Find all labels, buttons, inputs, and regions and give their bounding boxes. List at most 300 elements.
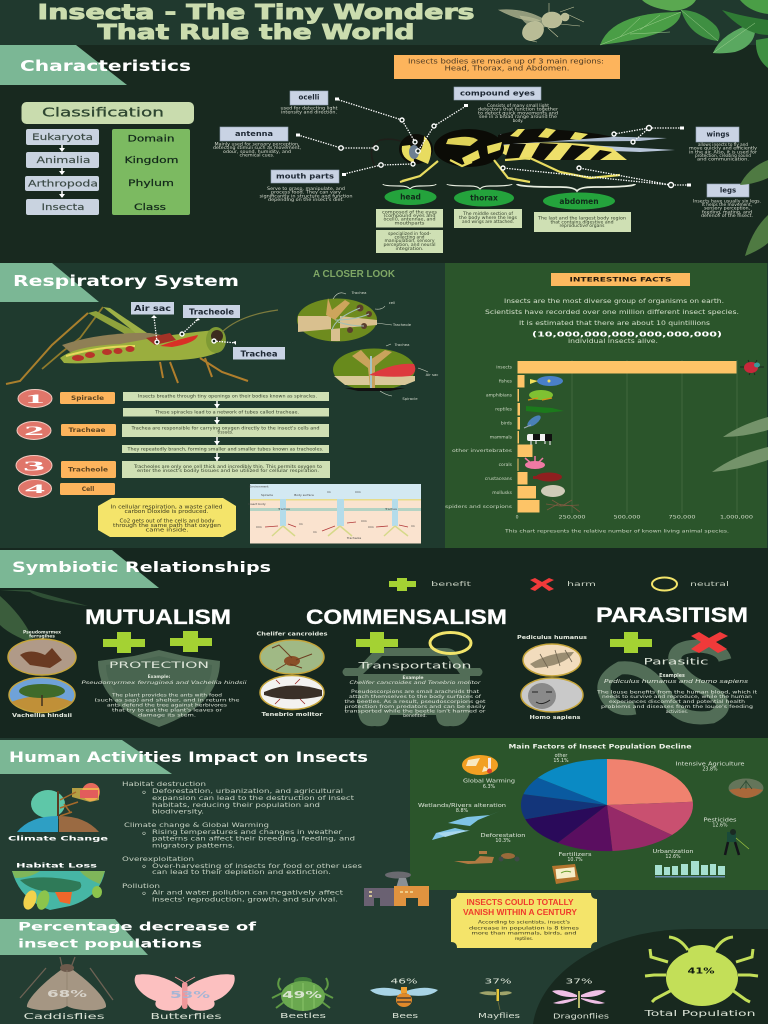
body regions: thorax xyxy=(470,194,498,202)
icon: dragonflies xyxy=(552,978,609,1020)
panel: parasitism: Examples xyxy=(659,673,685,679)
wasp label: compound eyes xyxy=(416,87,559,153)
icon: bees: 46% xyxy=(390,978,418,986)
text block: human impacts: biodiversity. xyxy=(152,810,204,816)
panel: mutualism: MUTUALISM xyxy=(85,606,231,629)
illustration: closer look diagram two: Trachea xyxy=(394,342,409,347)
diagram: tracheal system: Trachea xyxy=(384,507,397,511)
diagram: tracheal system: O₂ xyxy=(299,522,304,526)
panel: commensalism: Transportation xyxy=(357,662,472,672)
heading: interesting facts xyxy=(551,273,690,286)
panel: parasitism: needs to survive and reproduce, while the human xyxy=(602,694,752,700)
pie chart: main factors of insect population decline: 12.6% xyxy=(665,854,681,860)
icon: agriculture xyxy=(728,778,764,798)
wasp label: legs: It helps the movement, xyxy=(702,202,752,207)
icon: butterflies xyxy=(135,974,235,1021)
pie chart: main factors of insect population decline: Main Factors of Insect Population Decline xyxy=(508,742,692,750)
diagram: tracheal system xyxy=(248,484,421,544)
icon: dragonflies: 37% xyxy=(566,978,593,986)
photo: Pediculus humanus xyxy=(517,635,587,676)
wasp label: mouth parts xyxy=(260,162,415,202)
photo: Pseudomyrmex ferrugines: ferrugines xyxy=(29,634,55,640)
text block: insect facts: It is estimated that there are about 10 quintillions xyxy=(519,321,710,327)
icon: total population bug xyxy=(643,937,758,1018)
icon: bees: Bees xyxy=(392,1012,419,1020)
icon: butterflies: 53% xyxy=(170,990,210,1001)
diagram: tracheal system: Trachea xyxy=(277,507,290,511)
icon: caddisflies moth: 68% xyxy=(47,989,87,1000)
step 4: cell xyxy=(18,480,115,498)
photo: Tenebrio molitor xyxy=(260,676,324,718)
photo: Homo sapiens xyxy=(521,678,583,721)
wasp label: mouth parts: Serve to grasp, manipulate, and xyxy=(267,186,346,191)
icon: mayflies: Mayflies xyxy=(478,1012,521,1020)
text block: human impacts: insects' reproduction, growth, and survival. xyxy=(152,898,338,904)
text block: human impacts: Overexploitation xyxy=(122,857,194,863)
panel: classification: Kingdom xyxy=(124,156,178,166)
icon: bees xyxy=(370,978,438,1020)
bar chart: known living animal species: corals xyxy=(499,462,513,468)
banner: percentage decrease of insect populations: insect populations xyxy=(18,936,202,950)
step 1: spiracle xyxy=(18,390,329,408)
title: That Rule the World xyxy=(98,20,414,44)
diagram: tracheal system: O₂ xyxy=(327,490,332,494)
photo: Chelifer cancroides xyxy=(256,632,328,674)
step 2: tracheae: Tracheae xyxy=(68,427,106,434)
step 2: tracheae: 2 xyxy=(24,423,44,438)
body regions: specialized in food- xyxy=(388,231,432,236)
backdrop: total population xyxy=(533,929,768,1024)
panel: commensalism xyxy=(256,606,507,726)
wasp label: wings: protection, creating sound xyxy=(695,153,751,158)
bar chart: known living animal species: mollusks xyxy=(492,490,513,496)
labels: grasshopper parts: Trachea xyxy=(240,350,278,358)
diagram: tracheal system: Environment xyxy=(249,484,269,488)
flow text: tracheae network xyxy=(123,401,329,416)
banner: Respiratory System xyxy=(0,263,239,302)
leaf: symbiotic panel xyxy=(0,590,88,644)
bar chart: known living animal species: 750,000 xyxy=(668,514,696,520)
callout: insects could vanish xyxy=(451,893,597,948)
body regions: perception, and neural xyxy=(384,242,436,247)
photo: Chelifer cancroides: Chelifer cancroides xyxy=(256,632,328,638)
panel: classification: Classification xyxy=(42,106,164,120)
icon: lobster xyxy=(533,472,562,482)
panel: mutualism: that try to eat the plant's leaves or xyxy=(112,708,222,714)
illustration: closer look diagram two xyxy=(333,342,438,401)
pie chart: main factors of insect population decline: Intensive Agriculture xyxy=(676,762,745,768)
wasp label: compound eyes: Consists of many small light xyxy=(487,103,549,108)
wasp label: wings: move quickly and efficiently xyxy=(689,146,758,150)
bar chart: known living animal species: 250,000 xyxy=(558,514,586,520)
body regions: The last and the largest body region xyxy=(537,216,627,220)
pie chart: main factors of insect population decline: Fertilizers xyxy=(558,852,592,858)
body regions: collecting and xyxy=(394,234,425,240)
text block: human impacts: habitats, reducing their population and xyxy=(152,803,320,809)
wasp label: antenna xyxy=(213,127,378,158)
callout: three body regions: Insects bodies are made up of 3 main regions: xyxy=(408,58,604,66)
wasp label: antenna: Mainly used for sensory perception, xyxy=(214,142,300,146)
icon: beetles xyxy=(272,977,333,1020)
icon: bee sketch xyxy=(499,3,584,44)
panel: commensalism: attach themselves to the body surfaces of xyxy=(349,694,481,700)
illustration: grasshopper xyxy=(6,307,278,384)
icon: cow xyxy=(527,434,552,445)
step 4: cell: Cell xyxy=(82,486,94,493)
heading: a closer look: A CLOSER LOOK xyxy=(313,269,396,280)
icon: caddisflies moth xyxy=(20,957,113,1021)
wasp label: compound eyes: detectors that function together xyxy=(478,106,558,112)
icon: bird xyxy=(524,413,542,429)
callout: three body regions: Head, Thorax, and Abdomen. xyxy=(444,64,570,72)
leaves: chart panel xyxy=(712,417,768,472)
bar chart: known living animal species: 0 xyxy=(516,514,519,520)
wasp label: compound eyes: compound eyes xyxy=(460,90,535,98)
bar chart: known living animal species: fishes xyxy=(499,378,513,384)
pie chart: main factors of insect population decline: 6.3% xyxy=(483,784,496,790)
photo: Tenebrio molitor: Tenebrio molitor xyxy=(262,712,323,718)
banner: percentage decrease of insect populations: Percentage decrease of xyxy=(18,920,258,934)
panel: classification: Insecta xyxy=(42,203,84,213)
wasp label: compound eyes: see in a broad range around the xyxy=(479,114,558,119)
wasp label: ocelli: intensity and direction. xyxy=(281,110,337,114)
bar chart: known living animal species: birds xyxy=(501,420,513,426)
panel: classification: Phylum xyxy=(128,179,174,189)
body regions: that contains digestive and xyxy=(550,220,614,224)
panel: parasitism: Parasitic xyxy=(644,658,709,668)
pie chart: main factors of insect population decline: Deforestation xyxy=(480,833,526,839)
legend: benefit harm neutral: harm xyxy=(567,580,596,588)
diagram: tracheal system: CO₂ xyxy=(361,519,368,523)
title xyxy=(38,0,474,44)
pie chart: main factors of insect population decline: Urbanization xyxy=(652,849,694,855)
body regions: integration. xyxy=(396,246,424,251)
bar chart: known living animal species: amphibians xyxy=(486,392,513,398)
wasp label: legs: feeding, mating, and xyxy=(702,210,753,214)
step 4: cell: 4 xyxy=(25,481,47,496)
panel: parasitism: The louse benefits from the human blood, which it xyxy=(596,690,757,696)
wasp label: wings: wings xyxy=(706,130,730,138)
illustration: closer look diagram one xyxy=(297,290,412,342)
text block: human impacts: migratory patterns. xyxy=(152,844,235,850)
callout: insects could vanish: INSECTS COULD TOTALLY xyxy=(466,897,574,907)
wasp label: wings xyxy=(612,126,758,162)
wasp label: wings: and communication. xyxy=(697,156,749,162)
icon: habitat loss xyxy=(12,862,105,911)
step 2: tracheae xyxy=(17,417,329,440)
body regions: composed of the eyes xyxy=(382,210,437,214)
panel: mutualism: The plant provides the ants with food xyxy=(111,692,222,698)
legend: benefit harm neutral: neutral xyxy=(690,580,729,588)
panel: parasitism: Pediculus humanus and Homo sapiens xyxy=(604,679,749,685)
step 2: tracheae: tissues. xyxy=(218,430,233,434)
wasp label: ocelli: ocelli xyxy=(299,94,319,102)
panel: mutualism: ants defend the tree against herbivores xyxy=(107,702,228,708)
step 3: tracheole: enter the insect's bodily tissues and be utilized for cellular respiration. xyxy=(137,468,319,473)
wasp label: mouth parts: depending on the insect's diet. xyxy=(268,197,344,202)
diagram: tracheal system: Tracheole xyxy=(346,536,361,540)
panel: mutualism xyxy=(8,606,248,727)
wasp label: legs: legs xyxy=(720,186,736,194)
banner: Symbiotic Relationships: Symbiotic Relationships xyxy=(12,560,271,576)
legend: benefit harm neutral: benefit xyxy=(431,580,472,588)
diagram: tracheal system: O₂ xyxy=(411,524,416,528)
panel: parasitism: PARASITISM xyxy=(596,604,748,627)
bar chart: known living animal species: spiders and scorpions xyxy=(445,504,513,510)
body regions: ocelli), antennae, and xyxy=(384,216,436,222)
pie chart: main factors of insect population decline: Global Warming xyxy=(463,778,515,784)
diagram: tracheal system: Spiracle xyxy=(261,493,273,497)
icon: dragonflies: Dragonflies xyxy=(553,1012,609,1020)
callout: insects could vanish: VANISH WITHIN A CENTURY xyxy=(463,907,577,917)
step 2: tracheae: Trachea are responsible for carrying oxygen directly to the insect's cells and xyxy=(130,426,320,430)
icon: climate change: Climate Change xyxy=(8,834,109,842)
pie chart: main factors of insect population decline: 15.1% xyxy=(553,758,569,764)
step 1: spiracle: Insects breathe through tiny openings on their bodies known as spiracles. xyxy=(138,394,317,398)
icon: butterflies: Butterflies xyxy=(150,1012,222,1021)
photo: Vachellia hindsii xyxy=(9,678,75,719)
panel: mutualism: PROTECTION xyxy=(109,661,209,671)
diagram: tracheal system: O₂ xyxy=(313,530,318,534)
wasp label: mouth parts: significantly in structure and function xyxy=(260,194,353,198)
panel: parasitism: activities. xyxy=(666,709,688,715)
body regions: head xyxy=(400,192,421,202)
callout: cellular respiration: In cellular respiration, a waste called xyxy=(110,504,222,510)
diagram: tracheal system: CO₂ xyxy=(355,490,362,494)
icon: factory xyxy=(364,872,429,906)
panel: commensalism: transported while the beetle isn't harmed or xyxy=(344,708,486,714)
body regions: The middle section of xyxy=(462,211,514,216)
bar chart: known living animal species: mammals xyxy=(490,434,513,440)
wasp label: legs xyxy=(501,166,761,218)
text block: human impacts: can lead to their depletion and extinction. xyxy=(152,870,331,876)
wasp label: ocelli xyxy=(280,91,417,144)
panel: classification: Domain xyxy=(128,134,174,144)
body regions: and wings are attached. xyxy=(462,219,514,224)
icon: spider xyxy=(546,500,580,512)
text block: insect facts xyxy=(485,299,739,345)
icon: beetles: 49% xyxy=(282,990,322,1001)
panel: commensalism: COMMENSALISM xyxy=(306,606,507,629)
banner: Respiratory System: Respiratory System xyxy=(13,272,239,290)
callout: cellular respiration xyxy=(98,498,236,537)
photo: Vachellia hindsii: Vachellia hindsii xyxy=(12,713,72,719)
text block: insect facts: (10,000,000,000,000,000,000) xyxy=(532,330,722,338)
text block: human impacts: expansion can lead to the destruction of insect xyxy=(152,796,355,802)
step 3: tracheole: 3 xyxy=(23,460,45,474)
body regions: manipulation, sensory xyxy=(384,238,435,243)
icon: lizard xyxy=(526,406,564,413)
photo: Pediculus humanus: Pediculus humanus xyxy=(517,635,587,641)
labels: grasshopper parts: Air sac xyxy=(134,304,171,313)
body regions: (compound eyes and xyxy=(384,213,436,218)
leaves: top right xyxy=(600,0,768,68)
wasp label: antenna: antenna xyxy=(235,130,273,138)
icon: beetles: Beetles xyxy=(280,1011,326,1020)
callout: insects could vanish: According to scientists, insect's xyxy=(478,920,571,926)
step 3: tracheole xyxy=(16,453,330,478)
flow text: tracheae network: These spiracles lead to a network of tubes called tracheae. xyxy=(154,410,299,414)
pie chart: main factors of insect population decline: Wetlands/Rivers alteration xyxy=(418,803,506,809)
illustration: closer look diagram two: Spiracle xyxy=(402,396,418,401)
pie chart: main factors of insect population decline xyxy=(418,742,764,884)
bar chart: known living animal species: 500,000 xyxy=(614,514,641,520)
text block: human impacts: Climate change & Global Warming xyxy=(124,823,269,829)
banner: Symbiotic Relationships xyxy=(0,550,271,588)
wasp label: antenna: detecting stimuli such as movement, xyxy=(213,145,301,150)
text block: human impacts: Air and water pollution can negatively affect xyxy=(152,890,344,896)
flow text: branching: They repeatedly branch, forming smaller and smaller tubes known as tracheoles. xyxy=(126,446,324,452)
icon: global warming xyxy=(462,755,498,775)
panel: commensalism: Example xyxy=(402,675,424,681)
icon: caddisflies moth: Caddisflies xyxy=(24,1012,104,1021)
wasp label: legs: defence of the insect. xyxy=(701,213,753,218)
panel: classification: Arthropoda xyxy=(28,180,98,190)
wasp label: legs: Insects have usually six legs. xyxy=(693,198,761,204)
banner: percentage decrease of insect populations xyxy=(0,919,258,955)
illustration: closer look diagram one: cell xyxy=(389,300,395,305)
heading: interesting facts: INTERESTING FACTS xyxy=(570,278,672,284)
icon: habitat loss: Habitat Loss xyxy=(16,862,97,870)
panel: mutualism: Pseudomyrmex ferrugineá and Vachellia hindsii xyxy=(82,679,248,686)
pie chart: main factors of insect population decline: other xyxy=(555,753,567,759)
legend: benefit harm neutral xyxy=(389,578,729,591)
step 1: spiracle: 1 xyxy=(25,391,45,406)
wasp label: antenna: chemical cues. xyxy=(240,152,274,158)
callout: insects could vanish: reptiles. xyxy=(515,936,533,942)
body regions xyxy=(376,184,635,253)
bar chart: known living animal species xyxy=(445,360,764,534)
panel: parasitism: problems and diseases from the louse's feeding xyxy=(601,704,753,710)
step 1: spiracle: Spiracle xyxy=(71,395,104,402)
illustration: closer look diagram one: Trachea xyxy=(351,290,366,295)
panel: mutualism: (such as sap) and shelter, and in return the xyxy=(94,698,240,704)
icon: ladybug xyxy=(740,360,764,375)
text block: human impacts: Pollution xyxy=(122,884,160,890)
callout: insects could vanish: decrease in population is 8 times xyxy=(469,926,580,932)
panel: commensalism: Chelifer cancroides and Tenebrio molitor xyxy=(350,680,482,686)
illustration: wasp xyxy=(371,128,675,182)
panel: parasitism: experiences discomfort and potential health xyxy=(609,699,745,705)
wasp label: compound eyes: to detect quick movements and xyxy=(478,110,559,116)
icon: fertilizer bag xyxy=(552,864,579,884)
icon: deforestation logs xyxy=(454,851,520,864)
illustration: closer look diagram one: Tracheole xyxy=(392,322,412,327)
photo: Pseudomyrmex ferrugines: Pseudomyrmex xyxy=(23,630,61,636)
pie chart: main factors of insect population decline: 8.8% xyxy=(456,808,469,814)
panel: classification xyxy=(22,102,194,215)
body regions: abdomen xyxy=(559,197,599,206)
panel: commensalism: the beetles. As a result, pseudoscorpions get xyxy=(344,699,486,705)
banner: Characteristics xyxy=(0,45,191,85)
diagram: tracheal system: Body surface xyxy=(294,493,314,497)
pie chart: main factors of insect population decline: 10.7% xyxy=(567,857,583,863)
bar chart: known living animal species: This chart represents the relative number of known living animal species. xyxy=(504,528,729,534)
photo: Homo sapiens: Homo sapiens xyxy=(530,715,581,721)
icon: pesticide worker xyxy=(725,829,749,855)
icon: wetlands xyxy=(432,811,500,840)
panel: commensalism: protection from predators and can be easily xyxy=(344,704,486,710)
wasp label: legs: sensory perception, xyxy=(704,206,750,210)
diagram: tracheal system: CO₂ xyxy=(256,525,263,529)
icon: shell xyxy=(541,485,565,497)
labels: grasshopper parts: Tracheole xyxy=(189,308,235,316)
text block: human impacts xyxy=(122,782,362,904)
callout: cellular respiration: Co2 gets out of the cells and body xyxy=(120,518,215,524)
text block: human impacts: Habitat destruction xyxy=(122,782,206,788)
body regions: the body where the legs xyxy=(459,215,517,220)
panel: classification: Animalia xyxy=(36,156,90,166)
flow text: branching xyxy=(122,437,329,453)
body regions: mouthparts xyxy=(394,220,424,226)
panel: commensalism: Pseudoscorpions are small arachnids that xyxy=(351,689,479,695)
leaves: right edge xyxy=(740,160,768,256)
diagram: tracheal system: Insect body xyxy=(248,502,266,506)
pie chart: main factors of insect population decline: 10.3% xyxy=(495,838,511,844)
panel: mutualism: damage its stem. xyxy=(138,712,196,718)
callout: insects could vanish: more than mammals, birds, and xyxy=(472,930,577,936)
body regions: reproductive organs xyxy=(560,223,604,228)
icon: climate change xyxy=(8,783,109,842)
text block: human impacts: Deforestation, urbanization, and agricultural xyxy=(152,789,344,795)
icon: fish xyxy=(530,376,563,386)
pie chart: main factors of insect population decline: 12.6% xyxy=(712,822,728,828)
text block: insect facts: Scientists have recorded over one million different insect species. xyxy=(485,310,739,316)
text block: human impacts: Over-harvesting of insects for food or other uses xyxy=(152,864,362,870)
callout: three body regions xyxy=(394,55,620,79)
bar chart: known living animal species: crustaceans xyxy=(485,476,513,482)
text block: human impacts: patterns can affect their breeding, feeding, and xyxy=(152,836,355,842)
bar chart: known living animal species: insects xyxy=(496,364,513,370)
step 3: tracheole: Tracheole xyxy=(68,466,108,474)
wasp label: compound eyes: body. xyxy=(513,118,523,123)
icon: coral xyxy=(525,456,545,469)
panel: mutualism: Example: xyxy=(148,674,171,680)
text block: human impacts: Rising temperatures and changes in weather xyxy=(152,830,343,836)
photo: Pseudomyrmex ferrugines xyxy=(8,630,76,675)
callout: cellular respiration: carbon Dioxide is produced. xyxy=(124,509,209,515)
title: Insecta - The Tiny Wonders xyxy=(38,0,474,24)
panel: commensalism: benefited. xyxy=(403,713,427,719)
panel: classification: Class xyxy=(134,203,167,213)
icon: frog xyxy=(528,390,553,400)
wasp label: mouth parts: mouth parts xyxy=(276,172,334,180)
icon: mayflies: 37% xyxy=(484,978,512,986)
illustration: closer look diagram two: Air sac xyxy=(426,372,438,377)
wasp label: ocelli: used for detecting light xyxy=(280,106,338,110)
step 3: tracheole: Tracheoles are only one cell thick and incredibly thin. This permits oxygen to xyxy=(133,464,323,469)
wasp label: wings: allows insects to fly and xyxy=(698,142,748,147)
icon: city xyxy=(655,861,725,878)
wasp label: antenna: odour, sound, humidity, and xyxy=(223,149,292,154)
panel: classification: Eukaryota xyxy=(32,133,93,143)
icon: mayflies xyxy=(478,978,521,1020)
wasp label: mouth parts: process food. They can vary xyxy=(271,190,342,194)
banner: Human Activities Impact on Insects xyxy=(0,740,368,774)
icon: total population bug: Total Population xyxy=(643,1009,756,1018)
bar chart: known living animal species: reptiles xyxy=(495,406,513,412)
callout: cellular respiration: came inside. xyxy=(146,528,189,534)
panel: parasitism xyxy=(517,604,757,721)
pie chart: main factors of insect population decline: Pesticides xyxy=(704,818,737,824)
text block: insect facts: Insects are the most diverse group of organisms on earth. xyxy=(504,299,724,305)
bar chart: known living animal species: other invertebrates xyxy=(452,448,513,454)
text block: insect facts: individual insects alive. xyxy=(568,339,658,345)
icon: total population bug: 41% xyxy=(688,966,714,976)
banner: Characteristics: Characteristics xyxy=(20,57,191,75)
callout: cellular respiration: through the same path that oxygen xyxy=(113,523,221,529)
wasp label: wings: in the air. Also, it is used for xyxy=(689,150,757,154)
